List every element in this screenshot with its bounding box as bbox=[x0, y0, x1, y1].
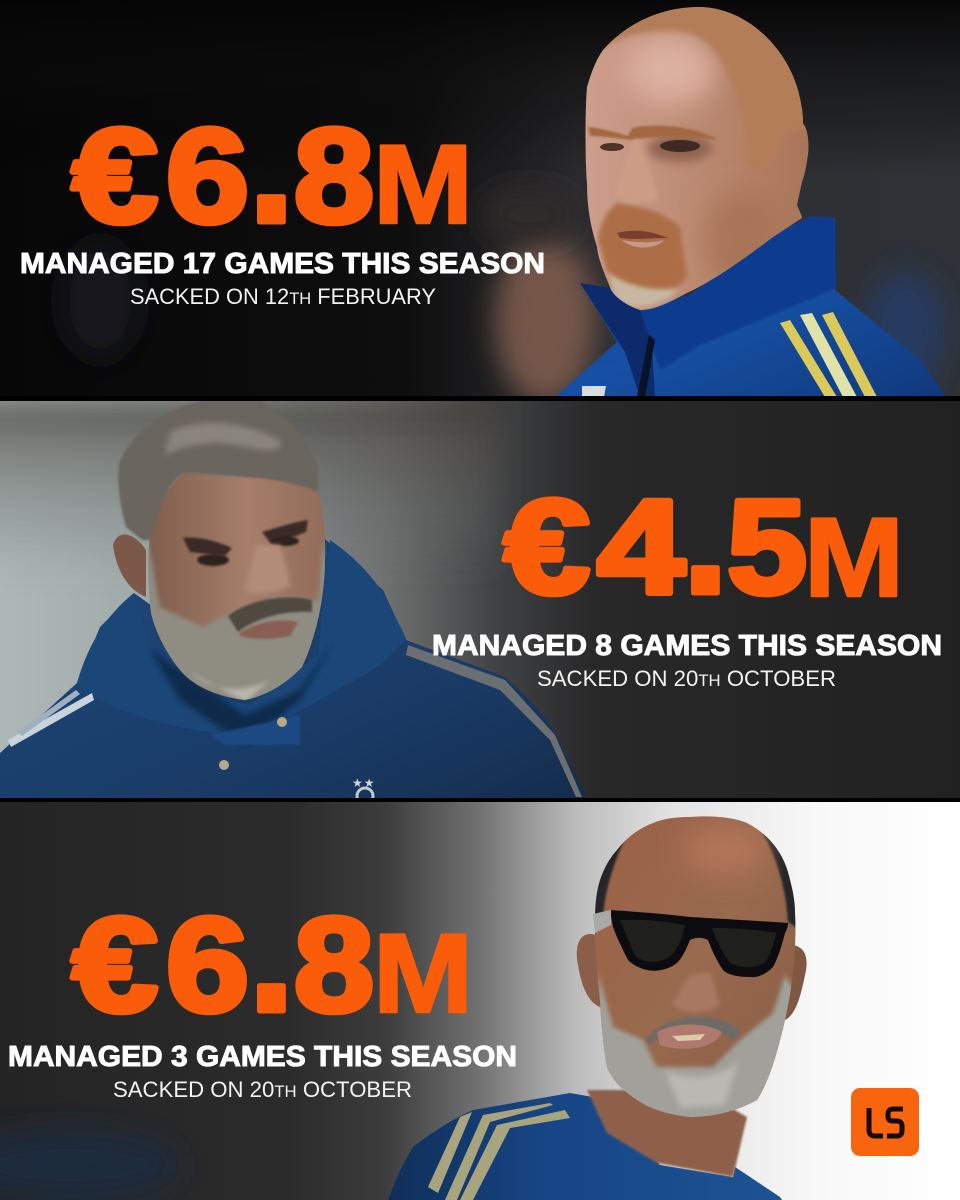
beard bbox=[598, 974, 792, 1117]
head bbox=[148, 473, 326, 700]
photo: manager in navy hooded jacket with grey hair bbox=[0, 398, 587, 804]
head bbox=[595, 816, 796, 1117]
hair bbox=[118, 398, 318, 540]
neck bbox=[587, 1090, 747, 1177]
beard bbox=[148, 541, 326, 700]
stat: 6.8M payout: . bbox=[248, 69, 295, 259]
stat: 4.5M payout: 4 bbox=[597, 473, 685, 622]
head bbox=[586, 7, 808, 310]
heading: managed 8 games: MANAGED 8 GAMES THIS SEASON bbox=[432, 630, 942, 662]
stat: 4.5M payout: M bbox=[804, 495, 904, 620]
panel: Sean Dyche payout bbox=[0, 0, 960, 405]
stat: 6.8M payout: 8 bbox=[294, 102, 374, 251]
stat: 6.8M payout: 8 bbox=[294, 891, 374, 1040]
stat: 6.8M payout bbox=[69, 914, 466, 1016]
stat: 4.5M payout: 5 bbox=[727, 473, 807, 622]
stat: 6.8M payout bbox=[69, 125, 466, 226]
stat: 6.8M payout: € bbox=[72, 102, 158, 251]
heading: managed 17 games: MANAGED 17 GAMES THIS SEASON bbox=[20, 248, 545, 280]
hair stubble bbox=[603, 7, 806, 168]
ears bbox=[577, 934, 603, 1008]
ear bbox=[803, 124, 808, 159]
text: sacked date: SACKED ON 20TH OCTOBER bbox=[537, 666, 836, 691]
photo: manager in blue jacket, bald with ginger beard bbox=[555, 0, 946, 397]
crest stars: ★★ bbox=[352, 776, 376, 790]
photo: manager in sunglasses with grey beard bbox=[388, 810, 807, 1200]
ear bbox=[113, 534, 146, 597]
stat: 4.5M payout bbox=[501, 496, 898, 598]
stat: 6.8M payout: 6 bbox=[166, 102, 249, 251]
text: sacked date: SACKED ON 12TH FEBRUARY bbox=[130, 284, 436, 309]
stat: 6.8M payout: M bbox=[373, 122, 473, 247]
stat: 6.8M payout: M bbox=[373, 911, 473, 1036]
stat: 6.8M payout: € bbox=[72, 891, 158, 1040]
sunglasses bbox=[610, 910, 788, 977]
stat: 6.8M payout: . bbox=[248, 858, 295, 1048]
stat: 4.5M payout: € bbox=[504, 473, 590, 622]
panel: Ange Postecoglou payout bbox=[0, 398, 960, 804]
stat: 6.8M payout: 6 bbox=[166, 891, 249, 1040]
icon: LS logo bbox=[851, 1088, 919, 1156]
panel: Nuno Espirito Santo payout bbox=[0, 802, 960, 1200]
heading: managed 3 games: MANAGED 3 GAMES THIS SEASON bbox=[8, 1041, 517, 1073]
beard bbox=[598, 203, 687, 303]
stat: 4.5M payout: . bbox=[682, 440, 729, 630]
text: sacked date: SACKED ON 20TH OCTOBER bbox=[113, 1077, 412, 1102]
